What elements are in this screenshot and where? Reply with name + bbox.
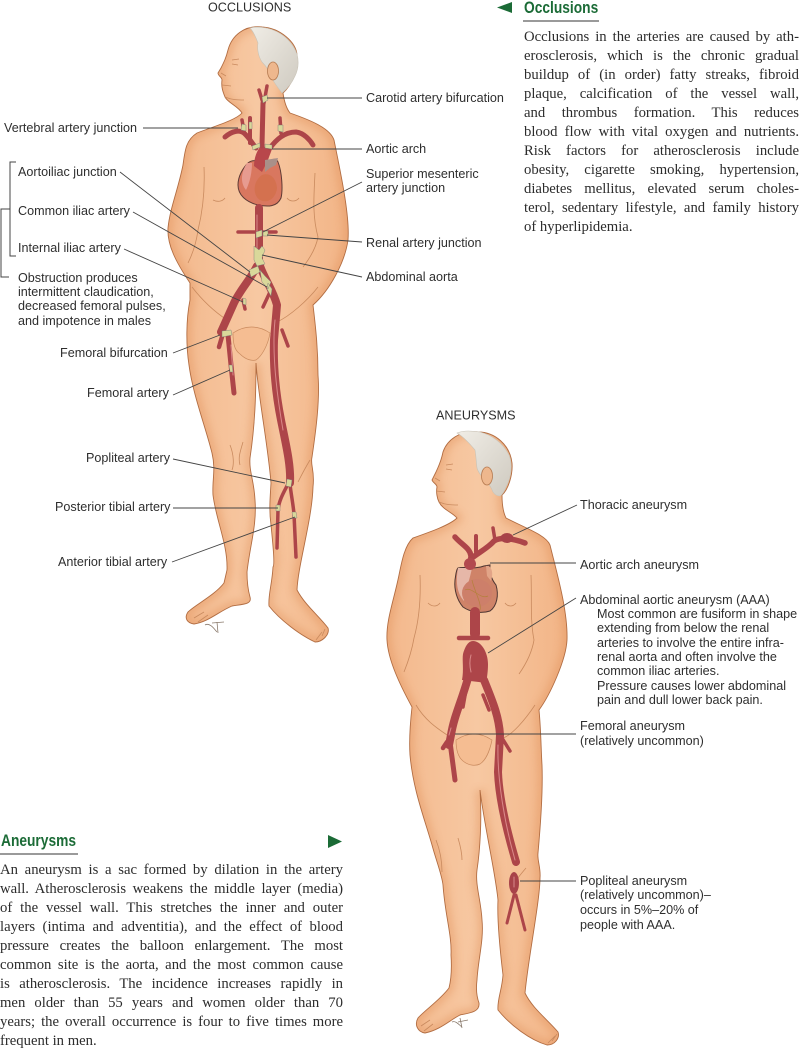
text block: occlusions description: terol, sedentary lifestyle, and family history [524, 200, 799, 216]
text block: occlusions description: obesity, cigarette smoking, hypertension, [524, 162, 799, 178]
labels: aneurysms: Popliteal aneurysm [580, 874, 687, 888]
labels: aneurysms: Most common are fusiform in shape [597, 607, 797, 621]
figure: man with arterial occlusion sites [168, 27, 348, 642]
leader lines: aneurysms [455, 505, 577, 881]
labels: aneurysms: extending from below the renal [597, 621, 769, 635]
labels: aneurysms: people with AAA. [580, 918, 675, 932]
heart [455, 565, 497, 612]
text block: aneurysms description: layers (intima and adventitia), and the effect of blood [0, 919, 343, 935]
text block: occlusions description: diabetes mellitus, elevated serum choles- [524, 181, 799, 197]
text block: aneurysms description [0, 862, 343, 1049]
text block: occlusions description [524, 29, 799, 235]
text block: aneurysms description: years; the overall occurrence is four to five times more [0, 1014, 343, 1030]
text block: aneurysms description: frequent in men. [0, 1033, 97, 1049]
arrow: occlusions pointing left [497, 2, 512, 13]
labels: aneurysms: (relatively uncommon) [580, 734, 704, 748]
heading: aneurysms figure title: ANEURYSMS [436, 408, 516, 422]
text block: occlusions description: plaque, calcification of the vessel wall, [524, 86, 799, 102]
text block: occlusions description: buildup of (in order) fatty streaks, fibroid [524, 67, 799, 83]
text block: occlusions description: Occlusions in the arteries are caused by ath- [524, 29, 799, 45]
text block: aneurysms description: pressure creates the balloon enlargement. The most [0, 938, 343, 954]
text block: occlusions description: blood flow with vital oxygen and nutrients. [524, 124, 799, 140]
text block: aneurysms description: of the vessel wall. This stretches the inner and outer [0, 900, 343, 916]
leader lines: occlusions [120, 98, 362, 562]
body silhouette [387, 432, 567, 1045]
labels: aneurysms: Pressure causes lower abdominal [597, 679, 786, 693]
labels: aneurysms: arteries to involve the entire infra- [597, 636, 784, 650]
text block: occlusions description: of hyperlipidemia. [524, 219, 632, 235]
text block: aneurysms description: common site is the aorta, and the most common cause [0, 957, 343, 973]
hair and ear [250, 27, 298, 93]
labels: aneurysms [580, 498, 797, 932]
figure: man with aneurysm sites [387, 431, 567, 1045]
labels: aneurysms: occurs in 5%–20% of [580, 903, 699, 917]
labels: aneurysms: common iliac arteries. [597, 664, 719, 678]
brackets: aortoiliac group [1, 162, 16, 277]
labels: aneurysms: Femoral aneurysm [580, 719, 685, 733]
arteries [443, 528, 525, 930]
labels: occlusions left side: Posterior tibial artery [55, 500, 171, 514]
labels: occlusions right side: Abdominal aorta [366, 270, 458, 284]
labels: aneurysms: pain and dull lower back pain. [597, 693, 763, 707]
labels: occlusions left side: Femoral artery [87, 386, 170, 400]
labels: occlusions left side [4, 121, 171, 569]
text block: aneurysms description: An aneurysm is a sac formed by dilation in the artery [0, 862, 343, 878]
labels: occlusions right side: Carotid artery bifurcation [366, 91, 504, 105]
labels: aneurysms: renal aorta and often involve the [597, 650, 777, 664]
text block: aneurysms description: wall. Atherosclerosis weakens the middle layer (media) [0, 881, 343, 897]
occlusion clip markers [222, 95, 297, 518]
labels: occlusions right side: Renal artery junction [366, 236, 482, 250]
heading: occlusions figure title: OCCLUSIONS [208, 0, 291, 14]
labels: occlusions right side: artery junction [366, 181, 445, 195]
labels: aneurysms: Thoracic aneurysm [580, 498, 687, 512]
labels: occlusions left side: Obstruction produces [18, 271, 138, 285]
labels: occlusions left side: Internal iliac artery [18, 241, 122, 255]
heading: aneurysms section: Aneurysms [1, 831, 76, 850]
labels: aneurysms: Abdominal aortic aneurysm (AAA) [580, 593, 770, 607]
labels: occlusions left side: Common iliac artery [18, 204, 131, 218]
text block: aneurysms description: is atherosclerosis. The incidence increases rapidly in [0, 976, 343, 992]
hair and ear [457, 431, 511, 496]
labels: occlusions right side [366, 91, 504, 284]
heart [238, 146, 282, 206]
text block: aneurysms description: men older than 55 years and women older than 70 [0, 995, 343, 1011]
arteries [219, 86, 313, 557]
labels: occlusions left side: intermittent claudication, [18, 285, 154, 299]
labels: occlusions left side: and impotence in males [18, 314, 151, 328]
body silhouette [168, 27, 348, 642]
labels: occlusions right side: Aortic arch [366, 142, 426, 156]
arrow: aneurysms pointing right [328, 835, 342, 848]
labels: occlusions left side: Vertebral artery junction [4, 121, 137, 135]
face and torso details [404, 464, 557, 1043]
labels: aneurysms: Aortic arch aneurysm [580, 558, 699, 572]
face and torso details [188, 59, 325, 640]
text block: occlusions description: erosclerosis, which is the chronic gradual [524, 48, 799, 64]
text block: occlusions description: Risk factors for atherosclerosis include [524, 143, 799, 159]
labels: occlusions left side: Aortoiliac junction [18, 165, 117, 179]
labels: aneurysms: (relatively uncommon)– [580, 888, 711, 902]
labels: occlusions left side: decreased femoral pulses, [18, 299, 166, 313]
labels: occlusions left side: Popliteal artery [86, 451, 171, 465]
labels: occlusions right side: Superior mesenteric [366, 167, 479, 181]
text block: occlusions description: and thrombus formation. This reduces [524, 105, 799, 121]
labels: occlusions left side: Anterior tibial artery [58, 555, 168, 569]
labels: occlusions left side: Femoral bifurcation [60, 346, 168, 360]
